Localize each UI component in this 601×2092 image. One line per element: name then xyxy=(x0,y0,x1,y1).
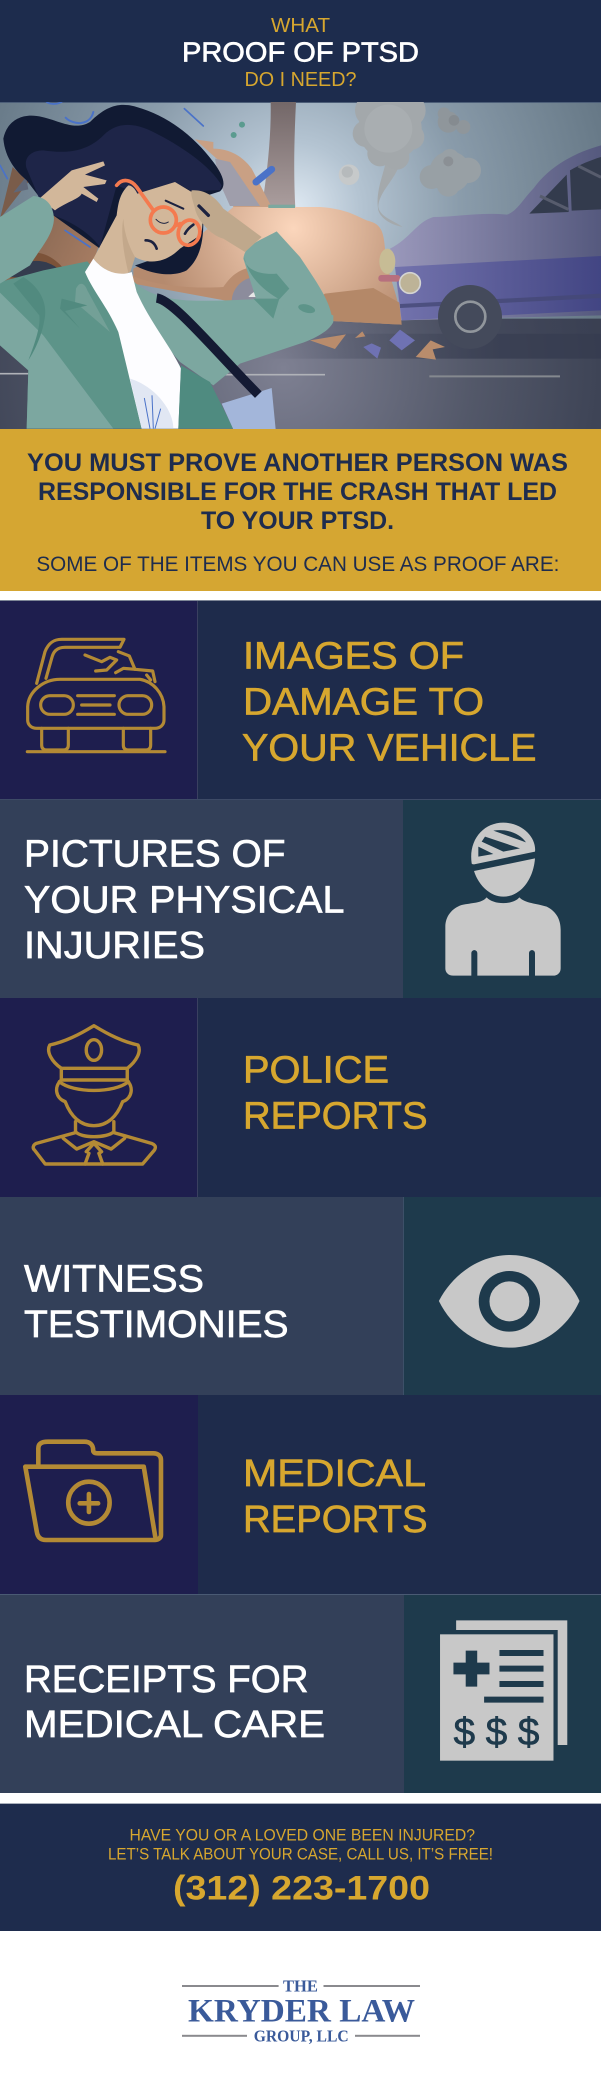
row 5: medical reports xyxy=(0,1395,601,1594)
debris shards xyxy=(310,330,445,360)
logo: The Kryder Law Group xyxy=(182,1977,420,2046)
icon: damaged car xyxy=(27,639,165,752)
label: witness testimonies xyxy=(24,1259,289,1346)
header banner xyxy=(0,0,601,102)
label: pictures of injuries xyxy=(24,834,344,967)
label: images of damage: YOUR VEHICLE xyxy=(242,728,536,770)
statement headline: RESPONSIBLE FOR THE CRASH THAT LED xyxy=(38,479,557,506)
glasses xyxy=(117,181,203,248)
footer call to action xyxy=(0,1803,601,1931)
hand on forehead xyxy=(191,190,262,252)
row 3: police reports xyxy=(0,998,601,1197)
call to action text: HAVE YOU OR A LOVED ONE BEEN INJURED? xyxy=(130,1825,475,1844)
panel: prove responsibility xyxy=(0,429,601,591)
statement subline: SOME OF THE ITEMS YOU CAN USE AS PROOF ARE: xyxy=(36,553,559,576)
label: images of damage: DAMAGE TO xyxy=(243,682,484,724)
orange car xyxy=(0,139,420,327)
phone number: (312) 223-1700 xyxy=(173,1869,430,1907)
purple car xyxy=(390,145,601,349)
title: proof of PTSD: PROOF OF PTSD xyxy=(182,36,419,68)
statement headline: TO YOUR PTSD. xyxy=(201,508,394,535)
label: witness testimonies: WITNESS xyxy=(24,1259,204,1301)
label: medical reports xyxy=(243,1453,428,1541)
label: receipts for medical care: RECEIPTS FOR xyxy=(24,1659,308,1701)
icon: police officer xyxy=(33,1026,155,1164)
label: pictures of injuries: YOUR PHYSICAL xyxy=(24,880,344,922)
icon: medical bill xyxy=(440,1620,567,1761)
row 4: witness testimonies xyxy=(0,1197,601,1395)
icon: eye xyxy=(439,1255,580,1348)
label: receipts for medical care: MEDICAL CARE xyxy=(24,1704,325,1746)
woman xyxy=(0,105,333,429)
logo: The Kryder Law Group: GROUP, LLC xyxy=(254,2027,349,2046)
logo: The Kryder Law Group: KRYDER LAW xyxy=(188,1994,415,2030)
call to action text xyxy=(108,1825,493,1863)
label: police reports xyxy=(243,1050,428,1138)
road xyxy=(0,319,601,432)
label: police reports: REPORTS xyxy=(243,1096,428,1138)
row 2: pictures of injuries xyxy=(0,799,601,998)
row 6: receipts for medical care xyxy=(0,1594,601,1793)
label: receipts for medical care xyxy=(24,1659,325,1746)
title: do I need: DO I NEED? xyxy=(244,68,356,91)
label: witness testimonies: TESTIMONIES xyxy=(24,1304,289,1346)
label: police reports: POLICE xyxy=(243,1050,389,1092)
icon: medical folder xyxy=(25,1442,161,1540)
statement headline: YOU MUST PROVE ANOTHER PERSON WAS xyxy=(27,450,568,477)
label: pictures of injuries: INJURIES xyxy=(24,925,205,967)
smoke clouds xyxy=(339,93,481,227)
title: what: WHAT xyxy=(271,14,330,37)
icon: medical bill: $$$ xyxy=(454,1711,540,1754)
row 1: images of damage xyxy=(0,600,601,799)
label: images of damage xyxy=(242,636,536,770)
icon: person with bandaged head xyxy=(445,823,561,976)
logo: The Kryder Law Group: THE xyxy=(283,1977,318,1996)
call to action text: LET’S TALK ABOUT YOUR CASE, CALL US, IT’S FREE! xyxy=(108,1844,493,1863)
statement headline xyxy=(27,450,568,535)
blazer xyxy=(0,261,180,429)
decorative marks xyxy=(0,102,272,247)
label: images of damage: IMAGES OF xyxy=(243,636,464,678)
label: medical reports: MEDICAL xyxy=(243,1453,426,1495)
label: medical reports: REPORTS xyxy=(243,1499,428,1541)
illustration: woman with headache in front of car crash xyxy=(0,93,601,432)
label: pictures of injuries: PICTURES OF xyxy=(24,834,286,876)
